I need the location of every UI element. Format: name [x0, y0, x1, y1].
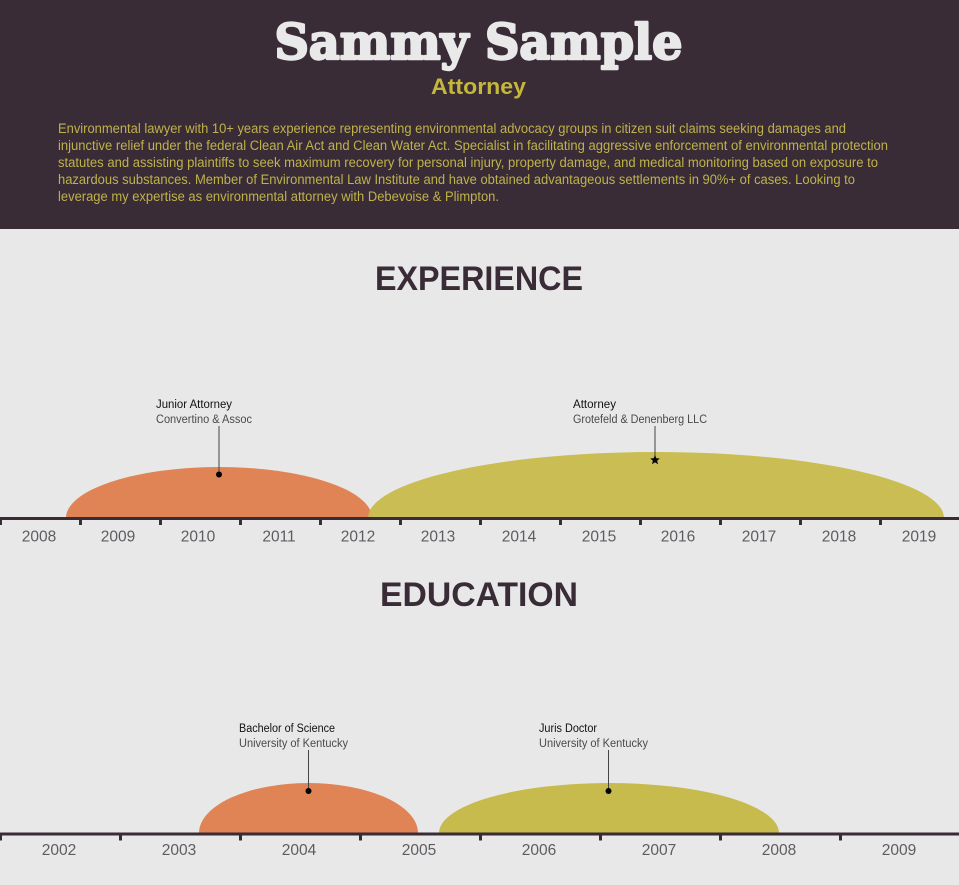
axis: education years: 2009: [882, 842, 916, 859]
axis: education years: 2002: [42, 842, 76, 859]
axis: education years: 2005: [402, 842, 436, 859]
callout: juris doctor: [539, 723, 648, 794]
text block: professional summary: [58, 121, 888, 204]
callout: bachelor of science: University of Kentucky: [239, 738, 348, 750]
axis: experience years: 2019: [902, 528, 936, 546]
callout: attorney: [573, 399, 707, 464]
axis: education years: 2006: [522, 842, 556, 859]
callout: attorney: Attorney: [573, 399, 616, 411]
text block: professional summary: statutes and assisting plaintiffs to seek maximum recovery for personal injury, property damage, and medical monitoring based on exposure to: [58, 155, 878, 170]
bar: junior attorney period: [66, 467, 372, 518]
axis: experience years: 2011: [262, 528, 296, 546]
axis: education years: 2004: [282, 842, 317, 859]
callout: juris doctor: Juris Doctor: [539, 723, 597, 735]
axis: experience years: [0, 517, 959, 546]
callout: juris doctor: University of Kentucky: [539, 738, 648, 750]
axis: education years: [0, 832, 959, 859]
axis: experience years: 2013: [421, 528, 455, 546]
callout: bachelor of science: [239, 723, 348, 794]
callout: attorney: Grotefeld & Denenberg LLC: [573, 414, 707, 426]
axis: experience years: 2018: [822, 528, 856, 546]
heading: experience: EXPERIENCE: [375, 260, 583, 298]
title: name: Sammy Sample: [274, 13, 682, 71]
icon: star marker: [650, 455, 660, 464]
text block: professional summary: leverage my expertise as environmental attorney with Debevoise & Plimpton.: [58, 189, 499, 204]
callout: junior attorney: Junior Attorney: [156, 399, 232, 411]
text block: professional summary: injunctive relief under the federal Clean Air Act and Clean Water Act. Specialist in facilitating aggressive enforcement of environmental protection: [58, 138, 888, 153]
subtitle: job title: Attorney: [431, 74, 527, 99]
chart: education timeline: [0, 723, 959, 859]
axis: education years: 2007: [642, 842, 676, 859]
axis: experience years: 2010: [181, 528, 216, 546]
axis: experience years: 2009: [101, 528, 135, 546]
callout: bachelor of science: Bachelor of Science: [239, 723, 335, 735]
text block: professional summary: Environmental lawyer with 10+ years experience representing environmental advocacy groups in citizen suit claims seeking damages and: [58, 121, 846, 136]
axis: education years: 2008: [762, 842, 796, 859]
axis: experience years: 2014: [502, 528, 537, 546]
axis: experience years: 2015: [582, 528, 616, 546]
bar: juris doctor period: [439, 783, 779, 833]
bar: attorney period: [368, 452, 944, 518]
axis: education years: 2003: [162, 842, 196, 859]
heading: education: EDUCATION: [380, 576, 578, 614]
axis: experience years: 2017: [742, 528, 776, 546]
callout: junior attorney: [156, 399, 252, 478]
bar: bachelor of science period: [199, 783, 418, 833]
callout: junior attorney: Convertino & Assoc: [156, 414, 252, 426]
axis: experience years: 2016: [661, 528, 695, 546]
chart: experience timeline: [0, 399, 959, 546]
axis: experience years: 2008: [22, 528, 56, 546]
text block: professional summary: hazardous substances. Member of Environmental Law Institute and have obtained advantageous settlements in 90%+ of cases. Looking to: [58, 172, 855, 187]
panel: header: [0, 0, 959, 229]
axis: experience years: 2012: [341, 528, 375, 546]
